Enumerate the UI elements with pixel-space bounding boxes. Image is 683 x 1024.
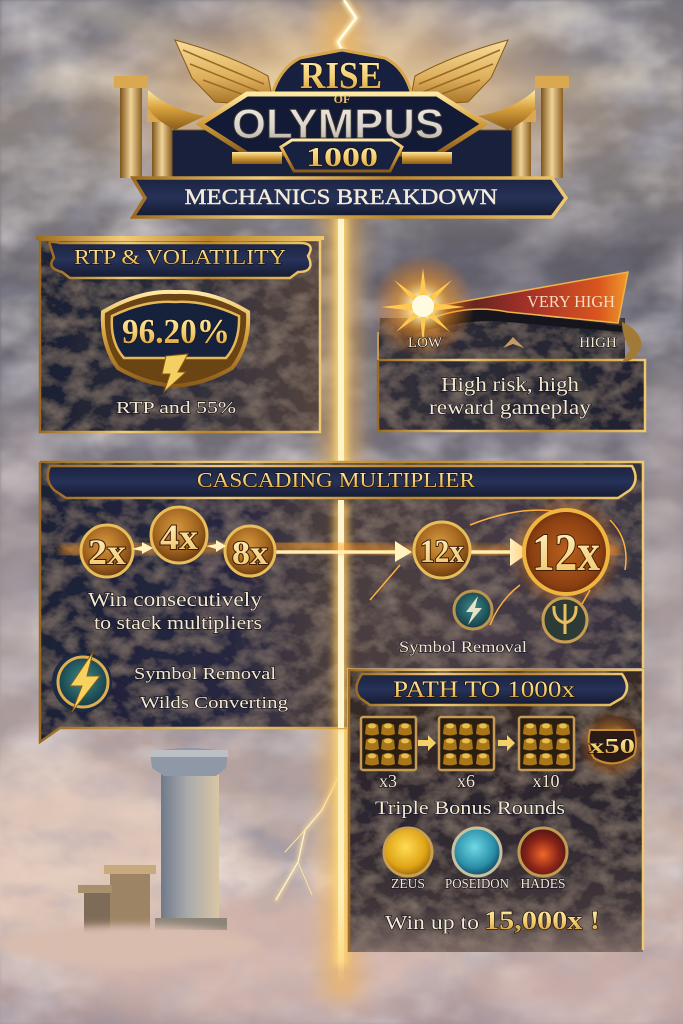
- RISE arch: [272, 50, 412, 95]
- label: x10: x10: [532, 771, 560, 791]
- icon: laurel: [622, 322, 642, 362]
- caption: symbol removal: Symbol Removal: [134, 664, 276, 683]
- icon: Zeus orb: ZEUS: [391, 876, 425, 891]
- distant marble column: [150, 748, 228, 930]
- reel grid x10: [519, 717, 574, 770]
- reel grids: [361, 711, 646, 779]
- arrow: 4x to 8x: [206, 540, 226, 552]
- OLYMPUS plate: [200, 94, 484, 154]
- heading banner: [48, 466, 636, 498]
- RTP shield badge: 96.20%: [122, 312, 230, 351]
- central lightning beam: [322, 0, 360, 1000]
- heading banner: CASCADING MULTIPLIER: [197, 468, 475, 492]
- icon: Poseidon orb: [445, 828, 509, 891]
- closing line: Win up to: [385, 912, 479, 934]
- icon: Poseidon orb: POSEIDON: [445, 876, 509, 891]
- closing line: [385, 906, 600, 935]
- starburst: [371, 254, 475, 358]
- x50 badge: x50: [589, 734, 635, 758]
- icon: right wing: [411, 40, 508, 104]
- lower bars: [232, 152, 452, 164]
- subtitle text: MECHANICS BREAKDOWN: [184, 184, 498, 209]
- coin 8x: 8x: [232, 535, 268, 572]
- coin 4x: [151, 507, 207, 563]
- arrow: 2x to 4x: [132, 542, 153, 554]
- multiplier chain: [60, 494, 626, 625]
- x50 badge: [578, 711, 646, 779]
- label: very high: VERY HIGH: [527, 292, 615, 311]
- coin large 12x: [508, 494, 624, 610]
- icon: lightning medallion: [52, 652, 112, 712]
- coin 12x: 12x: [420, 534, 464, 570]
- title: RISE: RISE: [300, 55, 382, 97]
- caption: win consecutively: Win consecutively: [88, 590, 262, 611]
- coin large 12x: 12x: [532, 524, 600, 582]
- heading banner: PATH TO 1000x: [393, 677, 576, 702]
- coin 8x: [225, 526, 275, 576]
- closing line: 15,000x !: [484, 906, 600, 935]
- forked lightning bottom: [276, 770, 342, 900]
- heading banner: RTP & VOLATILITY: [74, 245, 286, 269]
- icon: Zeus orb: [384, 828, 432, 891]
- coin 4x: 4x: [160, 517, 198, 557]
- heading: triple bonus rounds: Triple Bonus Rounds: [375, 798, 565, 819]
- caption: stack multipliers: to stack multipliers: [94, 614, 262, 634]
- heading banner: [49, 242, 311, 278]
- arrow: reel one to two: [418, 735, 436, 751]
- icon: lightning bolt: [162, 354, 188, 392]
- RTP shield badge: [103, 292, 248, 392]
- coin 2x: [81, 525, 133, 577]
- RTP caption: RTP and 55%: [116, 398, 236, 417]
- reel grid x3: [361, 717, 416, 770]
- header logo: [114, 40, 569, 178]
- label: high: HIGH: [579, 335, 617, 351]
- panel beam: [334, 500, 348, 728]
- label: x6: x6: [457, 771, 475, 791]
- label: x3: x3: [379, 771, 397, 791]
- 1000 plate: [281, 140, 402, 171]
- icon: trident coin: [543, 598, 587, 642]
- icon: right pillars and arch: [478, 76, 569, 178]
- coin 2x: 2x: [88, 532, 126, 572]
- title: OF: OF: [334, 92, 350, 106]
- icon: left pillars and arch: [114, 76, 205, 178]
- energy trail: [60, 510, 626, 625]
- coin 12x: [414, 522, 470, 578]
- icon: Hades orb: [519, 828, 567, 891]
- caption: wilds converting: Wilds Converting: [140, 693, 289, 712]
- panel: RTP and volatility: [36, 236, 324, 432]
- panel: volatility meter: [371, 254, 645, 431]
- panel: cascading multiplier: [40, 462, 643, 742]
- label: low: LOW: [408, 335, 443, 351]
- title: 1000: 1000: [306, 142, 378, 172]
- reel grid x6: [439, 717, 494, 770]
- arrow: reel two to three: [498, 735, 515, 751]
- wedge shadow: [420, 310, 622, 332]
- subtitle banner: [133, 178, 566, 217]
- icon: small lightning coin: [454, 591, 492, 629]
- plaque back: [172, 130, 512, 178]
- volatility caption line two: reward gameplay: [429, 398, 591, 419]
- volatility caption: High risk, high: [441, 375, 579, 396]
- icon: left wing: [175, 40, 272, 104]
- heading banner: [356, 674, 627, 705]
- panel: path to 1000x: [349, 670, 646, 952]
- icon: Hades orb: HADES: [520, 876, 566, 891]
- short broken columns: [0, 865, 260, 965]
- volatility wedge: [432, 272, 628, 323]
- caption: right symbol removal: Symbol Removal: [399, 639, 527, 656]
- icon: chevron marker: [503, 337, 524, 348]
- title: OLYMPUS: OLYMPUS: [232, 100, 444, 147]
